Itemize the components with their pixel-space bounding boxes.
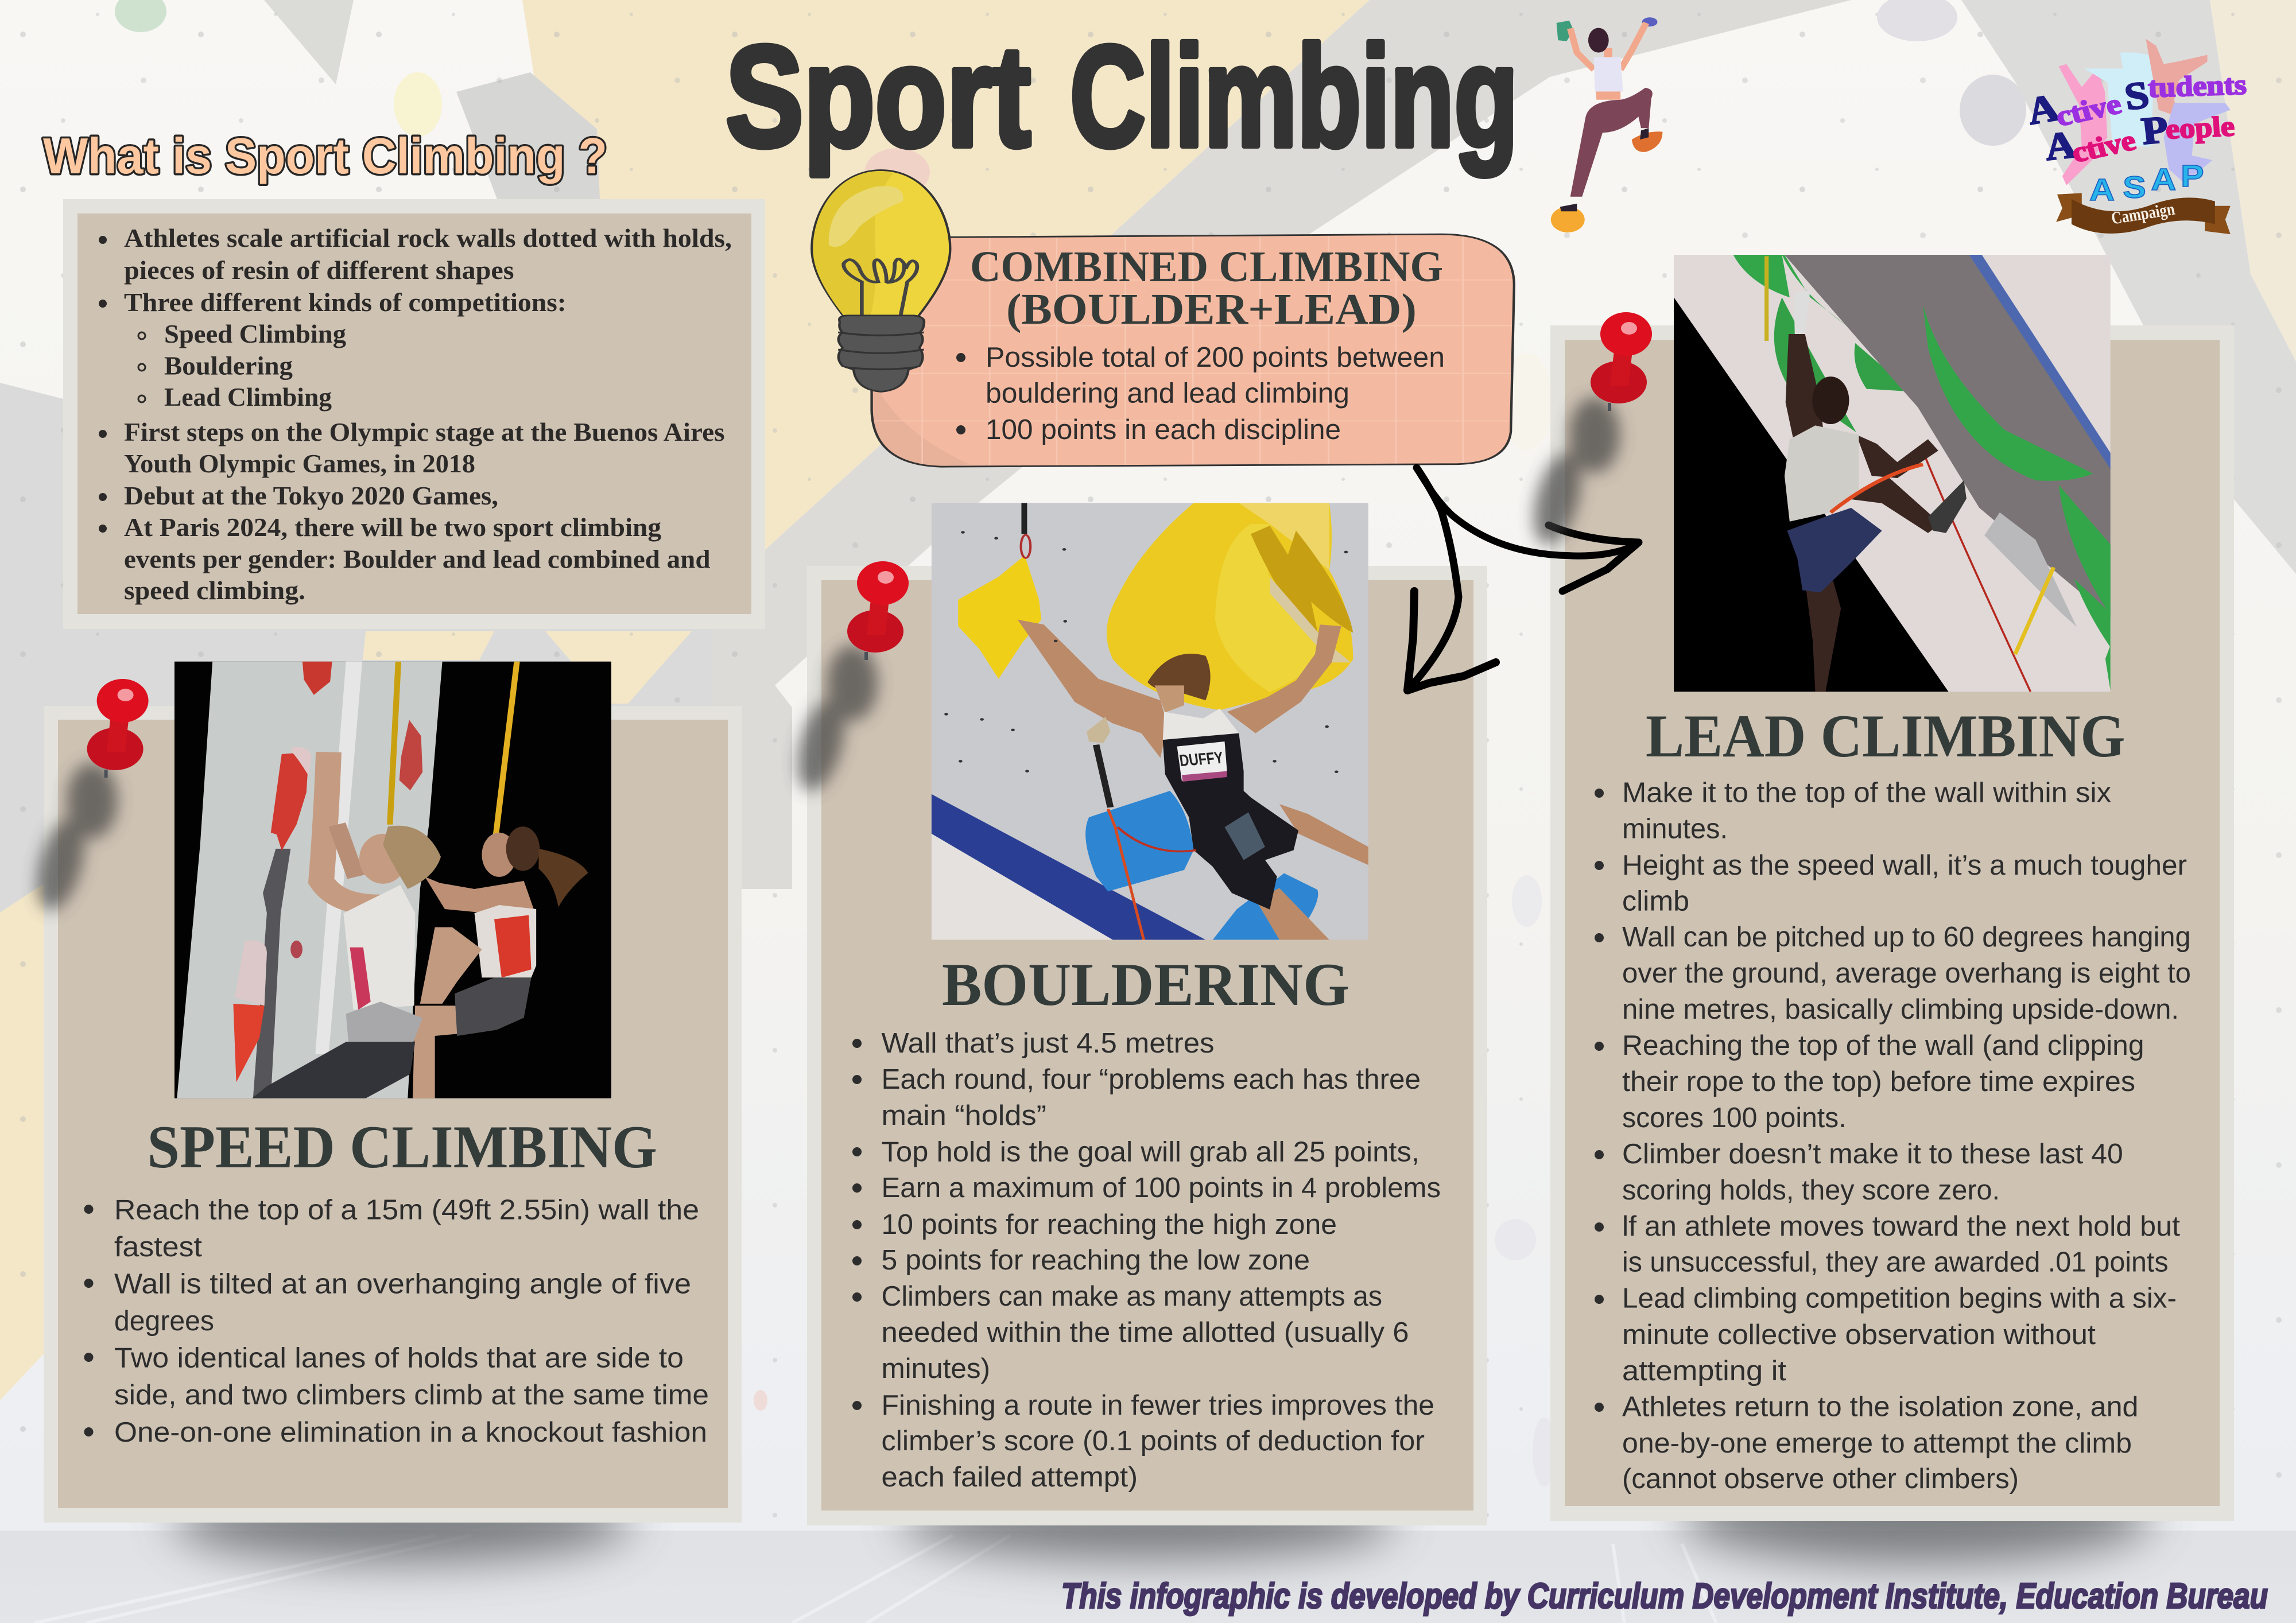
callout text: 100 points in each discipline <box>986 414 1341 445</box>
text: bouldering list: needed within the time allotted (usually 6 <box>882 1317 1409 1348</box>
text: lead climbing list: scores 100 points. <box>1622 1102 1847 1133</box>
logo: Active Students Active People ASAP Campaign <box>2023 39 2247 234</box>
bullets <box>852 1039 862 1410</box>
icon: light bulb <box>812 170 950 391</box>
bullets <box>84 1205 93 1436</box>
callout text: Possible total of 200 points between <box>986 342 1445 373</box>
text: lead climbing list: Athletes return to the isolation zone, and <box>1622 1392 2139 1423</box>
panel fill <box>77 213 751 614</box>
text: bouldering list: main “holds” <box>882 1100 1046 1131</box>
logo: Active Students Active People ASAP Campaign: tudents <box>2147 69 2247 103</box>
text: bouldering list <box>882 1028 1441 1493</box>
text: intro list: Three different kinds of competitions: <box>124 288 567 317</box>
text: lead climbing list <box>1622 778 2191 1494</box>
logo: Active Students Active People ASAP Campaign: ctive <box>2053 88 2124 133</box>
panel fill <box>821 580 1473 1511</box>
logo: Active Students Active People ASAP Campaign: A <box>2089 173 2115 207</box>
text: speed climbing list: fastest <box>114 1232 202 1263</box>
panel frame <box>63 199 765 629</box>
callout heading <box>970 243 1443 333</box>
text: intro list: Speed Climbing <box>164 319 346 348</box>
logo: Active Students Active People ASAP Campaign: S <box>2123 170 2146 205</box>
text: lead climbing list: is unsuccessful, they are awarded .01 points <box>1622 1247 2169 1278</box>
text: intro list: Athletes scale artificial rock walls dotted with holds, <box>124 223 732 253</box>
panel frame <box>807 566 1487 1525</box>
text: bouldering list: minutes) <box>882 1353 990 1384</box>
text: bouldering list: climber’s score (0.1 points of deduction for <box>882 1426 1425 1457</box>
drop shadows below panels <box>172 1467 2152 1563</box>
text: intro list: Debut at the Tokyo 2020 Games, <box>124 481 498 510</box>
panel frame <box>1550 325 2234 1521</box>
callout box <box>864 234 1518 468</box>
text: speed climbing list <box>114 1195 709 1448</box>
text: lead climbing list: lf an athlete moves toward the next hold but <box>1622 1211 2180 1242</box>
text: speed climbing list: Wall is tilted at an overhanging angle of five <box>114 1269 691 1300</box>
text: speed climbing list: side, and two climbers climb at the same time <box>114 1380 709 1411</box>
text: intro list: Bouldering <box>164 351 293 380</box>
text: intro list <box>124 223 732 605</box>
text: speed climbing list: Two identical lanes of holds that are side to <box>114 1343 684 1374</box>
callout bullets <box>956 353 965 434</box>
photo: two speed climbers <box>174 662 611 1098</box>
photo: boulderer on yellow hold: DUFFY <box>1178 748 1224 770</box>
icon: red pin on lead panel <box>1525 312 1652 550</box>
title: Sport Climbing: Climbing <box>1070 16 1518 176</box>
text: intro list: Lead Climbing <box>164 382 332 411</box>
text: lead climbing list: nine metres, basically climbing upside-down. <box>1622 994 2179 1025</box>
text: lead climbing list: Lead climbing competition begins with a six- <box>1622 1283 2177 1314</box>
title: Sport Climbing: Sport <box>726 16 1031 176</box>
text: bouldering list: Wall that’s just 4.5 metres <box>882 1028 1215 1059</box>
text: intro list: Youth Olympic Games, in 2018 <box>124 449 475 478</box>
text: lead climbing list: Climber doesn’t make it to these last 40 <box>1622 1139 2123 1170</box>
callout heading: (BOULDER+LEAD) <box>1006 285 1417 333</box>
text: speed climbing list: degrees <box>114 1306 214 1337</box>
bullets <box>99 236 145 533</box>
text: lead climbing list: over the ground, average overhang is eight to <box>1622 958 2191 989</box>
photo: lead climber on overhang <box>1674 255 2111 692</box>
arrow: to lead climbing <box>1417 468 1639 591</box>
panel: lead climbing <box>1550 255 2234 1521</box>
panel fill <box>1565 340 2220 1506</box>
text: lead climbing list: (cannot observe other climbers) <box>1622 1463 2019 1494</box>
icon: climber illustration <box>1551 17 1662 232</box>
text: lead climbing list: minutes. <box>1622 814 1728 845</box>
heading: speed climbing: SPEED CLIMBING <box>147 1113 657 1181</box>
text: lead climbing list: climb <box>1622 886 1689 917</box>
text: intro list: speed climbing. <box>124 576 305 605</box>
panel: what is sport climbing <box>63 199 765 629</box>
text: intro list: At Paris 2024, there will be two sport climbing <box>124 512 661 542</box>
text: intro list: pieces of resin of different shapes <box>124 255 514 285</box>
heading: lead climbing: LEAD CLIMBING <box>1646 702 2125 770</box>
text: lead climbing list: attempting it <box>1622 1356 1786 1387</box>
logo: Active Students Active People ASAP Campaign: S <box>2122 73 2152 118</box>
text: bouldering list: each failed attempt) <box>882 1462 1138 1493</box>
callout heading: COMBINED CLIMBING <box>970 243 1443 291</box>
text: speed climbing list: Reach the top of a 15m (49ft 2.55in) wall the <box>114 1195 699 1226</box>
logo: Active Students Active People ASAP Campaign: A <box>2023 86 2063 133</box>
text: speed climbing list: One-on-one elimination in a knockout fashion <box>114 1417 707 1448</box>
logo: Active Students Active People ASAP Campaign: ctive <box>2068 125 2139 169</box>
text: lead climbing list: Wall can be pitched up to 60 degrees hanging <box>1622 922 2191 953</box>
text: intro list: First steps on the Olympic stage at the Buenos Aires <box>124 417 724 446</box>
bullets <box>1595 789 1604 1412</box>
heading: bouldering: BOULDERING <box>942 951 1349 1018</box>
panel frame <box>44 706 742 1523</box>
photo: boulderer on yellow hold <box>932 503 1368 940</box>
text: bouldering list: Climbers can make as many attempts as <box>882 1281 1382 1312</box>
text: lead climbing list: their rope to the top) before time expires <box>1622 1066 2135 1097</box>
text: bouldering list: 5 points for reaching the low zone <box>882 1245 1310 1276</box>
text: lead climbing list: Height as the speed wall, it’s a much tougher <box>1622 850 2187 881</box>
text: lead climbing list: Reaching the top of the wall (and clipping <box>1622 1030 2144 1061</box>
panel fill <box>58 720 728 1508</box>
logo: Active Students Active People ASAP Campaign: eople <box>2165 111 2235 145</box>
logo: Active Students Active People ASAP Campaign: A <box>2042 123 2079 169</box>
text: lead climbing list: minute collective observation without <box>1622 1319 2096 1350</box>
icon: red pin on speed panel <box>29 679 149 915</box>
title: Sport Climbing <box>726 16 1518 176</box>
logo: Active Students Active People ASAP Campaign: Campaign <box>2109 199 2177 228</box>
arrow: to bouldering <box>1407 468 1496 690</box>
text: lead climbing list: Make it to the top of the wall within six <box>1622 778 2111 809</box>
text: lead climbing list: scoring holds, they score zero. <box>1622 1175 2000 1206</box>
logo: Active Students Active People ASAP Campaign: P <box>2139 108 2170 153</box>
logo: Active Students Active People ASAP Campaign: P <box>2181 159 2204 193</box>
callout text <box>986 342 1445 445</box>
callout: combined climbing <box>864 234 1518 468</box>
text: bouldering list: 10 points for reaching the high zone <box>882 1209 1337 1240</box>
logo: Active Students Active People ASAP Campaign: A <box>2151 162 2176 197</box>
text: bouldering list: Finishing a route in fewer tries improves the <box>882 1390 1434 1421</box>
heading: What is Sport Climbing ?: What is Sport Climbing ? <box>43 127 607 184</box>
text: bouldering list: Earn a maximum of 100 points in 4 problems <box>882 1172 1441 1203</box>
panel: bouldering <box>807 503 1487 1525</box>
text: bouldering list: Top hold is the goal will grab all 25 points, <box>882 1136 1420 1167</box>
callout text: bouldering and lead climbing <box>986 378 1349 409</box>
text: bouldering list: Each round, four “problems each has three <box>882 1064 1421 1095</box>
text: intro list: events per gender: Boulder and lead combined and <box>124 544 711 574</box>
panel: speed climbing <box>44 662 742 1523</box>
text: lead climbing list: one-by-one emerge to attempt the climb <box>1622 1428 2132 1459</box>
icon: red pin on bouldering panel <box>789 561 909 796</box>
